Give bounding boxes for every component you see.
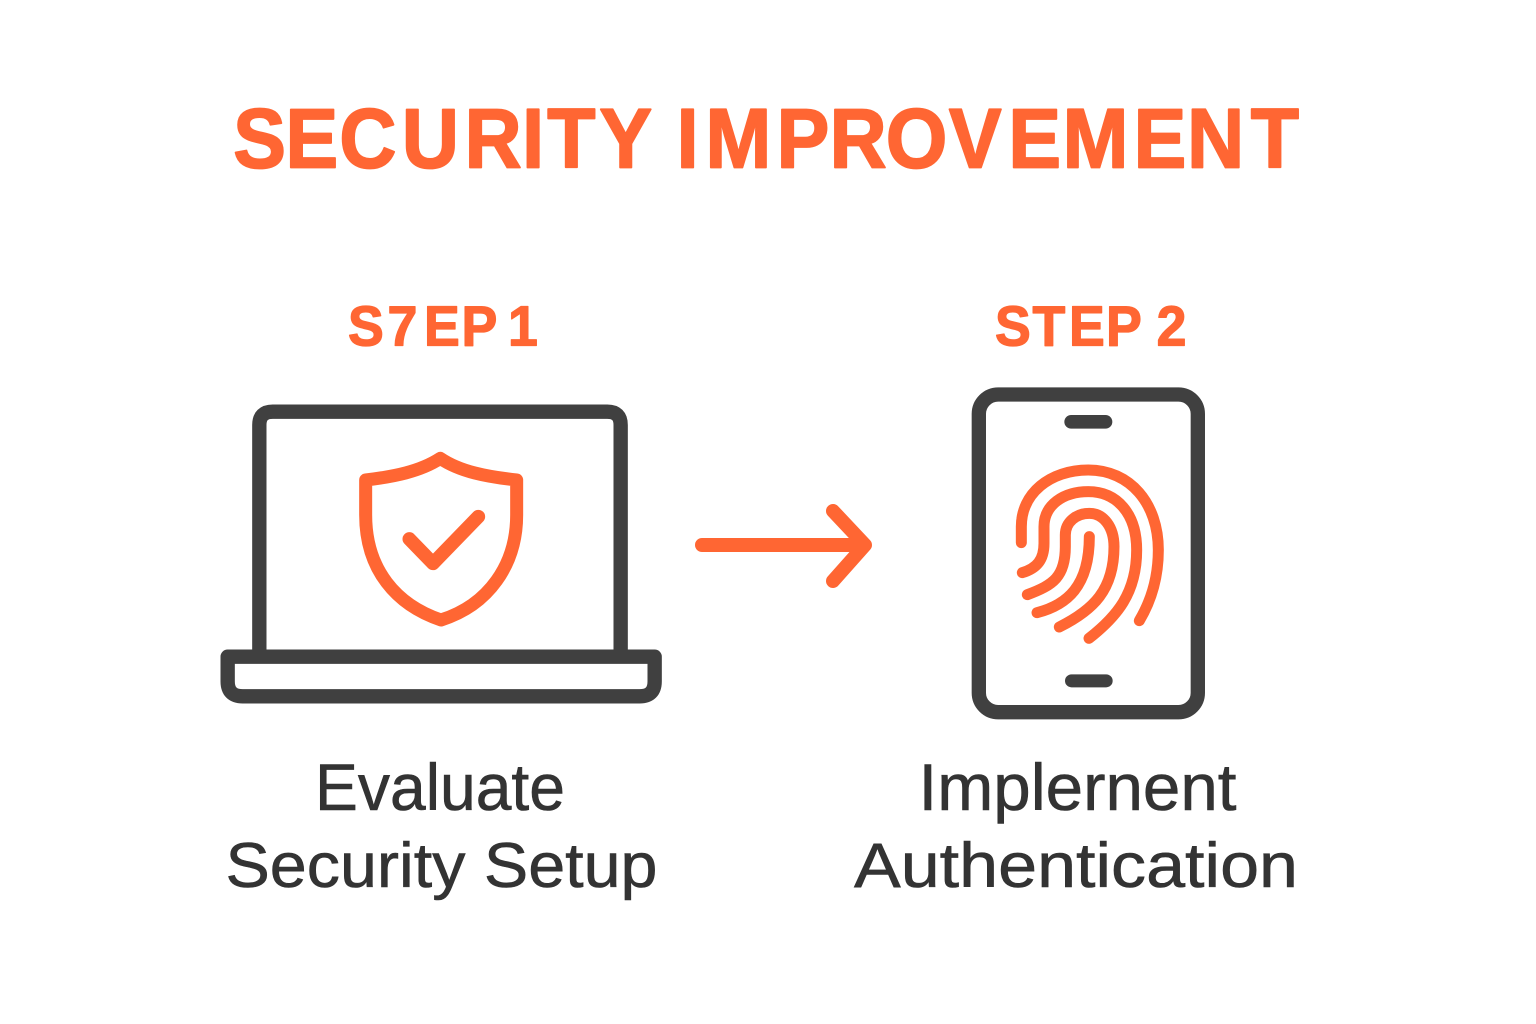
step 2 description: [854, 750, 1298, 901]
step 1 heading: S7EP 1: [348, 294, 538, 358]
phone bottom bar: [1065, 674, 1113, 687]
step 2 description: Authentication: [854, 831, 1298, 901]
title: SECURITY IMPROVEMENT: [233, 92, 1299, 186]
laptop screen: [259, 412, 621, 650]
step 2 description: Implernent: [918, 750, 1236, 824]
arrow: [702, 511, 865, 581]
icon: fingerprint: [1021, 470, 1158, 638]
phone top speaker: [1064, 415, 1112, 429]
icon: laptop with shield: [228, 412, 655, 696]
phone body: [979, 394, 1198, 712]
step 2 heading: STEP 2: [995, 294, 1186, 358]
step 1 description: [226, 750, 658, 901]
step 1 description: Evaluate: [315, 750, 565, 824]
icon: check mark: [409, 517, 478, 563]
icon: phone with fingerprint: [979, 394, 1198, 712]
step 1 description: Security Setup: [226, 831, 658, 901]
laptop base: [228, 657, 655, 696]
icon: shield: [366, 458, 517, 620]
